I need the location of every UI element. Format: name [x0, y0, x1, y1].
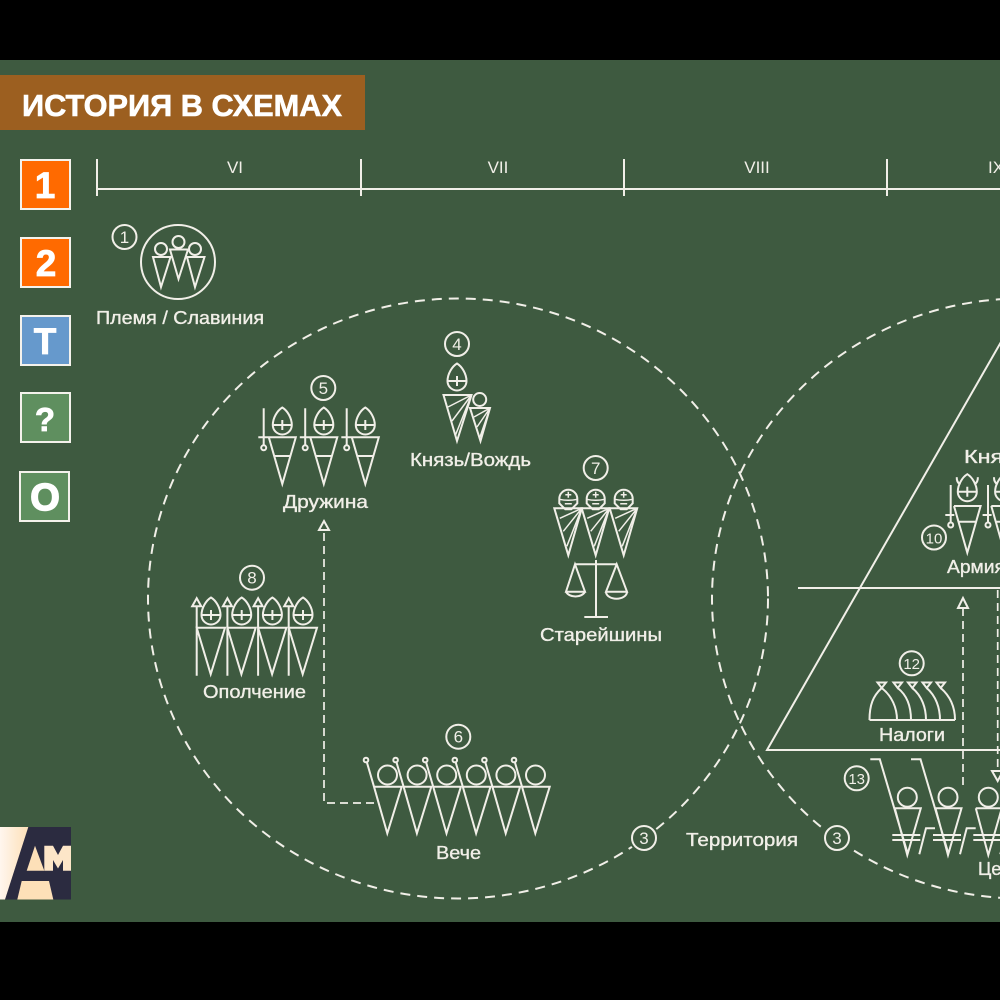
label: army: Армия [947, 557, 1000, 577]
number 7: 7 [591, 459, 600, 478]
number 4 [445, 332, 469, 356]
icon: army [945, 474, 1000, 553]
number 7 [584, 456, 608, 480]
number 3 right: 3 [832, 829, 842, 848]
sidebar buttons: О [30, 477, 60, 519]
icon: assembly [364, 758, 550, 833]
arrow: assembly to retinue [319, 521, 374, 803]
title [0, 75, 365, 130]
sidebar buttons: 1 [35, 165, 55, 206]
timeline [97, 158, 1000, 196]
pyramid [767, 342, 1000, 750]
sidebar buttons: ? [35, 401, 55, 438]
timeline: VII [488, 158, 508, 177]
dashed territory circle right [712, 298, 1000, 898]
icon: militia [192, 598, 317, 676]
number 6 [446, 725, 470, 749]
number 3 right [822, 823, 852, 853]
number 5 [311, 376, 335, 400]
sidebar buttons: Т [34, 321, 57, 362]
number 3 left: 3 [639, 829, 649, 848]
label: elders: Старейшины [540, 625, 662, 645]
number 8 [240, 566, 264, 590]
icon: retinue [258, 408, 379, 484]
number 10: 10 [926, 530, 942, 548]
number 6: 6 [454, 728, 463, 747]
logo [0, 827, 71, 900]
label: retinue: Дружина [283, 492, 369, 512]
title: ИСТОРИЯ В СХЕМАХ [22, 88, 342, 123]
icon: peasants [870, 759, 1000, 855]
sidebar buttons: 2 [36, 243, 56, 284]
timeline: VIII [744, 158, 770, 177]
number 13: 13 [848, 771, 865, 788]
icon: prince [444, 364, 490, 441]
number 5: 5 [319, 379, 328, 398]
number 1 [112, 225, 136, 249]
number 10 [922, 526, 946, 550]
number 12: 12 [903, 656, 920, 673]
label: militia: Ополчение [203, 682, 306, 702]
number 12 [900, 651, 924, 675]
icon: taxes [870, 682, 955, 720]
dashed territory circle left [148, 298, 768, 898]
number 8: 8 [247, 569, 257, 588]
number 1: 1 [120, 228, 129, 247]
number 13 [845, 766, 869, 790]
timeline: VI [227, 158, 243, 177]
label: prince: Князь/Вождь [410, 450, 531, 470]
icon: scales [566, 560, 627, 617]
label: tribe: Племя / Славиния [96, 308, 264, 328]
label: assembly: Вече [436, 843, 481, 863]
number 4: 4 [452, 335, 462, 354]
label: territory: Территория [686, 830, 798, 850]
number 3 left [629, 823, 659, 853]
arrows: pyramid flows [958, 590, 1000, 785]
label: taxes: Налоги [879, 725, 945, 745]
sidebar buttons [20, 160, 70, 521]
icon: elders [554, 490, 637, 555]
icon: tribe [141, 225, 215, 299]
